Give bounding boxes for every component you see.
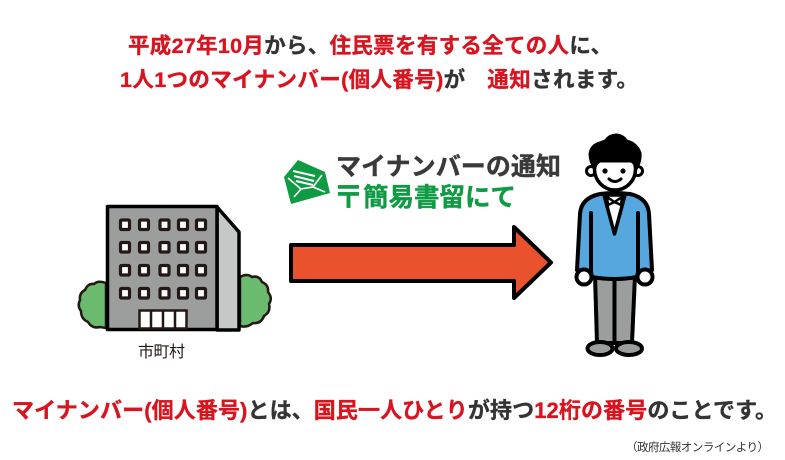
heading: by simple registered mail: 簡易書留にて xyxy=(363,184,516,212)
heading: my number notification: マイナンバーの通知 xyxy=(336,153,561,181)
trousers xyxy=(595,275,635,343)
sweater xyxy=(577,193,652,279)
mouth xyxy=(609,179,621,182)
shirt collar and tie xyxy=(604,195,625,234)
icon: city hall building with trees xyxy=(79,206,271,330)
building windows xyxy=(120,220,206,298)
hands xyxy=(576,270,592,284)
label: municipality: 市町村 xyxy=(138,343,185,361)
title xyxy=(120,34,638,92)
building entrance xyxy=(140,310,186,329)
title: 平成27年10月から、住民票を有する全ての人に、 xyxy=(128,34,612,58)
shoes xyxy=(588,342,612,355)
ears xyxy=(586,166,596,176)
title: 1人1つのマイナンバー(個人番号)が 通知されます。 xyxy=(120,67,638,92)
icon: right tree xyxy=(240,275,271,327)
icon: green opened envelope xyxy=(284,160,330,204)
building front wall xyxy=(108,206,217,330)
building side wall xyxy=(217,207,239,330)
arm lines xyxy=(591,213,638,272)
face xyxy=(594,148,636,190)
hair xyxy=(589,134,641,171)
eyes xyxy=(602,168,608,174)
heading: by simple registered mail: 〒 xyxy=(333,180,364,215)
heading: by simple registered mail xyxy=(333,180,516,215)
icon: person xyxy=(576,134,652,355)
arrow: notification direction xyxy=(291,227,551,298)
icon: left tree xyxy=(79,282,106,328)
source note: （政府広報オンラインより） xyxy=(626,440,769,454)
explanatory sentence: マイナンバー(個人番号)とは、国民一人ひとりが持つ12桁の番号のことです。 xyxy=(12,398,777,423)
